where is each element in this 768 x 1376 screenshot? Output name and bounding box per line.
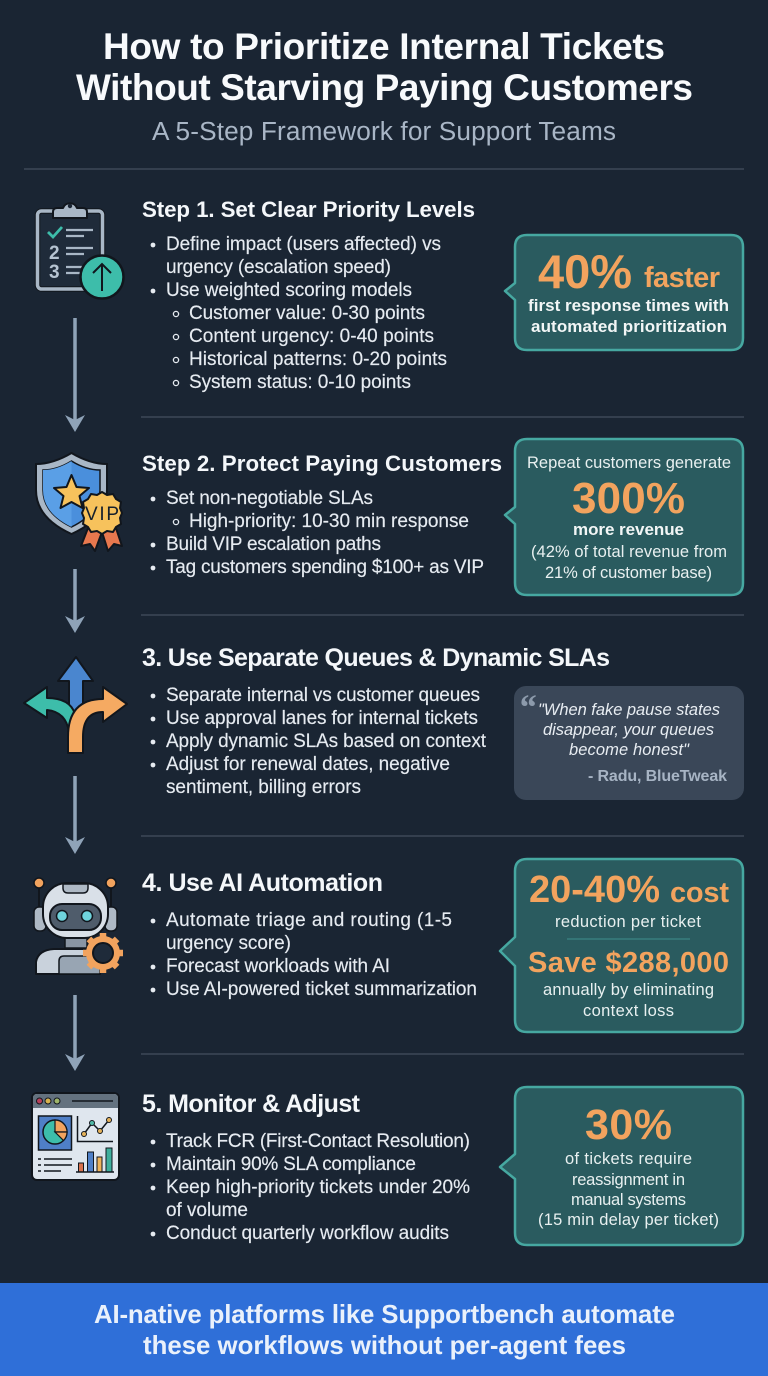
callout: 40% faster: first response times with	[528, 296, 729, 315]
callout: quote: "When fake pause states	[538, 701, 720, 719]
callout: 300% more revenue: 300%	[572, 474, 685, 523]
callout: cost reduction	[500, 859, 743, 1032]
callout: 30% reassignment	[500, 1087, 743, 1245]
bullet list: Build VIP escalation paths	[166, 534, 381, 555]
icon: shield with VIP badge	[36, 453, 122, 551]
callout: 30% reassignment: 30%	[585, 1101, 672, 1149]
footer banner: AI-native platforms like Supportbench automate	[94, 1301, 675, 1329]
bullet list: Define impact (users affected) vs	[166, 234, 441, 255]
title: Without Starving Paying Customers	[76, 67, 693, 108]
bullet list: sentiment, billing errors	[166, 777, 361, 798]
bullet list	[151, 685, 487, 798]
bullet list: Apply dynamic SLAs based on context	[166, 731, 487, 752]
bullet list: Use approval lanes for internal tickets	[166, 708, 478, 729]
bullet list: Historical patterns: 0-20 points	[189, 349, 447, 370]
callout: 300% more revenue: more revenue	[573, 520, 684, 539]
icon: clipboard with up arrow: 2	[49, 243, 60, 264]
callout: quote: - Radu, BlueTweak	[588, 768, 727, 785]
bullet list: Use weighted scoring models	[166, 280, 412, 301]
callout: quote: become honest"	[569, 741, 690, 759]
icon: three-way split arrows	[24, 657, 127, 753]
heading: Step 1. Set Clear Priority Levels	[142, 197, 475, 222]
icon: shield with VIP badge: VIP	[85, 504, 119, 525]
bullet list: Use AI-powered ticket summarization	[166, 979, 477, 1000]
arrow: step 2 to 3	[65, 569, 85, 633]
bullet list: Keep high-priority tickets under 20%	[166, 1177, 470, 1198]
title: How to Prioritize Internal Tickets	[103, 26, 665, 67]
bullet list: System status: 0-10 points	[189, 372, 411, 393]
icon: robot with gear	[34, 878, 123, 974]
bullet list: Content urgency: 0-40 points	[189, 326, 434, 347]
icon: dashboard window	[32, 1093, 119, 1180]
callout: quote: disappear, your queues	[543, 721, 714, 739]
callout: quote	[514, 686, 744, 800]
callout: 40% faster: automated prioritization	[531, 317, 727, 336]
callout: cost reduction: Save $288,000	[528, 947, 729, 979]
footer banner	[0, 1283, 768, 1376]
callout: 300% more revenue: 21% of customer base)	[545, 564, 712, 582]
panel: step 1	[38, 197, 743, 393]
arrow: step 1 to 2	[65, 318, 85, 432]
bullet list: Track FCR (First-Contact Resolution)	[166, 1131, 470, 1152]
bullet list: urgency (escalation speed)	[166, 257, 391, 278]
callout: 40% faster	[505, 235, 743, 350]
bullet list	[151, 488, 484, 578]
callout: 300% more revenue	[505, 439, 743, 595]
title	[76, 26, 693, 108]
callout: 30% reassignment: manual systems	[571, 1191, 686, 1209]
bullet list	[151, 1131, 470, 1244]
bullet list: Maintain 90% SLA compliance	[166, 1154, 416, 1175]
callout: 40% faster: 40%	[538, 245, 632, 298]
bullet list	[151, 234, 447, 393]
callout: 30% reassignment: of tickets require	[565, 1150, 692, 1168]
arrow: step 4 to 5	[65, 995, 85, 1071]
bullet list: urgency score)	[166, 933, 291, 954]
heading: Step 2. Protect Paying Customers	[142, 451, 502, 476]
callout: cost reduction: reduction per ticket	[555, 913, 701, 931]
callout: 300% more revenue: (42% of total revenue from	[531, 543, 727, 561]
bullet list: of volume	[166, 1200, 248, 1221]
bullet list: High-priority: 10-30 min response	[189, 511, 469, 532]
bullet list	[151, 910, 477, 1000]
bullet list: Separate internal vs customer queues	[166, 685, 480, 706]
panel: step 5	[32, 1087, 743, 1245]
heading: 4. Use AI Automation	[142, 869, 383, 897]
bullet list: Adjust for renewal dates, negative	[166, 754, 450, 775]
panel: step 2	[36, 439, 743, 595]
bullet list: Customer value: 0-30 points	[189, 303, 425, 324]
callout: 30% reassignment: (15 min delay per ticket)	[538, 1211, 719, 1229]
heading: 3. Use Separate Queues & Dynamic SLAs	[142, 644, 610, 672]
callout: 30% reassignment: reassignment in	[572, 1171, 685, 1189]
callout: 40% faster: faster	[644, 262, 720, 294]
icon: clipboard with up arrow: 3	[49, 262, 60, 283]
callout: cost reduction: 20-40%	[529, 869, 660, 911]
heading: 5. Monitor & Adjust	[142, 1090, 361, 1118]
panel: step 4	[34, 859, 743, 1032]
bullet list: Forecast workloads with AI	[166, 956, 390, 977]
callout: 300% more revenue: Repeat customers generate	[527, 454, 731, 472]
bullet list: Conduct quarterly workflow audits	[166, 1223, 449, 1244]
icon: clipboard with up arrow	[38, 203, 124, 298]
footer banner: these workflows without per-agent fees	[143, 1332, 626, 1360]
callout: cost reduction: context loss	[583, 1002, 674, 1020]
bullet list: Tag customers spending $100+ as VIP	[166, 557, 484, 578]
bullet list: Automate triage and routing (1-5	[166, 910, 452, 931]
callout: cost reduction: annually by eliminating	[543, 981, 714, 999]
callout: quote: “	[518, 687, 536, 727]
callout: cost reduction: cost	[670, 877, 729, 909]
subtitle: A 5-Step Framework for Support Teams	[152, 116, 616, 146]
bullet list: Set non-negotiable SLAs	[166, 488, 373, 509]
panel: step 3	[24, 644, 744, 800]
arrow: step 3 to 4	[65, 776, 85, 854]
